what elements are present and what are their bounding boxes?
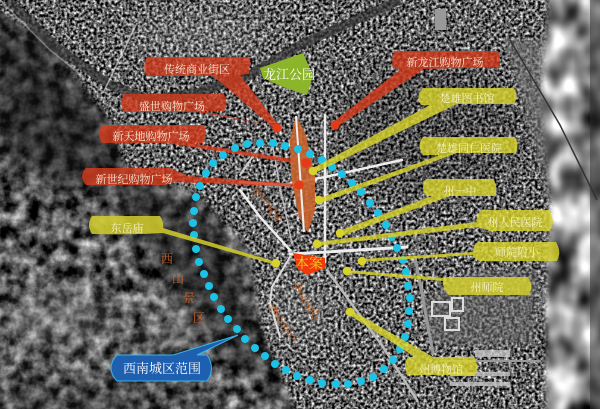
label: street name north-west [253, 186, 283, 223]
marker: 本案 project site: 本案 [295, 255, 323, 272]
red marker [272, 124, 282, 132]
panel: 龙江公园 green park [260, 53, 315, 95]
callout: 新天地购物广场 [99, 125, 306, 165]
callout: 盛世购物广场: 盛世购物广场 [139, 99, 205, 113]
callout: 东岳庙: 东岳庙 [110, 221, 144, 235]
label: street name north-west: 步 [264, 199, 274, 210]
callout: 楚雄图书馆: 楚雄图书馆 [440, 91, 494, 105]
label: 西山景区: 山 [172, 272, 184, 286]
callout: 州师院 [343, 267, 531, 295]
south-east flat land [425, 270, 540, 345]
label: street name north-west: 商 [253, 186, 263, 197]
label: street names south: 行 [310, 309, 320, 321]
railway on the east [510, 40, 597, 200]
label: street names south: 步 [282, 322, 292, 335]
callout: 东岳庙 [89, 216, 280, 267]
label: 西山景区: 景 [183, 291, 195, 305]
label: street names south: 商 [268, 304, 278, 317]
label: street name north-west: 行 [268, 206, 278, 217]
white housing blocks [432, 298, 463, 330]
callout: 州一中: 州一中 [444, 184, 476, 198]
school field [435, 9, 446, 30]
marker: 本案 project site [293, 253, 325, 275]
panel: red shopping district callouts [82, 51, 500, 187]
callout: 州人民医院: 州人民医院 [488, 215, 542, 229]
river and highway band [0, 0, 400, 112]
callout: 盛世购物广场 [121, 94, 280, 127]
label: street names south: 商 [292, 282, 302, 295]
label: street names south: 业 [299, 292, 309, 305]
panel: yellow public facility callouts [89, 88, 559, 376]
callout: 西南城区范围: 西南城区范围 [123, 361, 201, 376]
callout: 楚雄图书馆 [309, 88, 516, 175]
callout: 师院附小 [358, 242, 559, 265]
callout: 传统商业街区 [144, 57, 283, 131]
callout: 传统商业街区: 传统商业街区 [164, 62, 230, 76]
label: 西山景区 [161, 252, 205, 325]
street center line over spindle [296, 116, 304, 232]
callout: 州博物馆 [346, 308, 477, 376]
label: 西山景区: 西 [161, 252, 173, 266]
right blurred strip [538, 0, 600, 409]
tonal variation in the city [130, 10, 520, 350]
white streets [240, 115, 540, 400]
callout: 西南城区范围 [111, 335, 238, 381]
callout: 州博物馆: 州博物馆 [419, 362, 463, 376]
boundary: dotted cyan ring [189, 139, 414, 388]
callout: 师院附小: 师院附小 [495, 245, 540, 259]
orange pedestrian spindle [290, 115, 315, 233]
callout: 楚雄同仁医院 [315, 137, 518, 204]
mountain terrain [0, 7, 300, 409]
callout: 新世纪购物广场 [82, 168, 299, 187]
label: 西山景区: 区 [193, 311, 205, 325]
label: street names south: 业 [275, 312, 285, 325]
panel: 龙江公园 green park: 龙江公园 [263, 67, 315, 82]
label: street names south: 行 [287, 332, 297, 344]
red markers on the spindle [294, 158, 311, 190]
eastern soft farmland [505, 40, 560, 240]
label: street names south [268, 282, 320, 344]
callout: 州人民医院 [313, 210, 553, 248]
label: street name north-west: 业 [259, 192, 269, 203]
label: street name north-west: 街 [273, 212, 283, 223]
label: street names south: 步 [303, 301, 313, 314]
callout: 新龙江购物广场: 新龙江购物广场 [406, 55, 484, 69]
callout: 新龙江购物广场 [330, 51, 500, 130]
callout: 新天地购物广场: 新天地购物广场 [112, 129, 190, 143]
callout: 州师院: 州师院 [470, 280, 504, 294]
callout: 新世纪购物广场: 新世纪购物广场 [96, 172, 172, 186]
callout: 楚雄同仁医院: 楚雄同仁医院 [436, 141, 502, 155]
callout: 州一中 [336, 179, 496, 237]
